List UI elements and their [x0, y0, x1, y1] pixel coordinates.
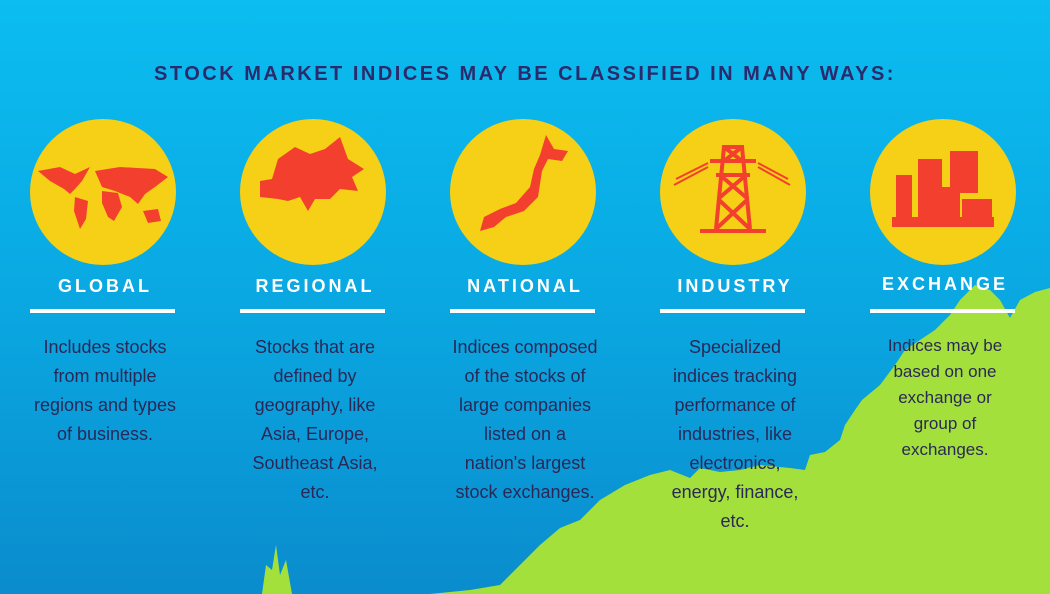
text: national: large companies: [459, 395, 591, 415]
text: exchange: Indices may be: [888, 336, 1002, 355]
text: industry: electronics,: [689, 453, 781, 473]
text: national: Indices composed: [452, 337, 598, 357]
panel: national: [450, 119, 598, 502]
text: industry: industries, like: [678, 424, 792, 444]
text: national: [452, 337, 598, 502]
text: regional: geography, like: [255, 395, 375, 415]
text: global: of business.: [57, 424, 153, 444]
text: regional: Asia, Europe,: [261, 424, 369, 444]
icon: japan map: [450, 119, 596, 265]
text: industry: performance of: [674, 395, 796, 415]
panel: regional: [240, 119, 386, 502]
label: industry: INDUSTRY: [677, 276, 793, 296]
text: industry: indices tracking: [673, 366, 797, 386]
label: global: GLOBAL: [58, 276, 152, 296]
text: global: from multiple: [53, 366, 157, 386]
text: global: [34, 337, 176, 444]
text: national: of the stocks of: [464, 366, 586, 386]
icon: power pylon: [660, 119, 806, 265]
text: regional: [252, 337, 378, 502]
text: regional: etc.: [300, 482, 330, 502]
icon: europe map: [240, 119, 386, 265]
icon: buildings: [870, 119, 1016, 265]
text: industry: Specialized: [689, 337, 781, 357]
panel: industry: [660, 119, 806, 531]
text: exchange: group of: [914, 414, 976, 433]
text: national: nation's largest: [465, 453, 585, 473]
text: industry: energy, finance,: [672, 482, 798, 502]
text: global: regions and types: [34, 395, 176, 415]
text: exchange: exchanges.: [902, 440, 988, 459]
title: STOCK MARKET INDICES MAY BE CLASSIFIED IN MANY WAYS:: [154, 63, 896, 85]
text: exchange: based on one: [893, 362, 997, 381]
text: exchange: exchange or: [898, 388, 992, 407]
panel: global: [30, 119, 176, 444]
text: global: Includes stocks: [43, 337, 167, 357]
icon: world map: [30, 119, 176, 265]
text: regional: defined by: [273, 366, 357, 386]
text: industry: [672, 337, 798, 531]
text: national: stock exchanges.: [455, 482, 595, 502]
text: industry: etc.: [720, 511, 750, 531]
text: regional: Stocks that are: [255, 337, 375, 357]
label: national: NATIONAL: [467, 276, 583, 296]
text: exchange: [888, 336, 1002, 459]
panel: exchange: [870, 119, 1016, 459]
text: national: listed on a: [484, 424, 566, 444]
label: exchange: EXCHANGE: [882, 274, 1008, 294]
label: regional: REGIONAL: [255, 276, 374, 296]
text: regional: Southeast Asia,: [252, 453, 378, 473]
